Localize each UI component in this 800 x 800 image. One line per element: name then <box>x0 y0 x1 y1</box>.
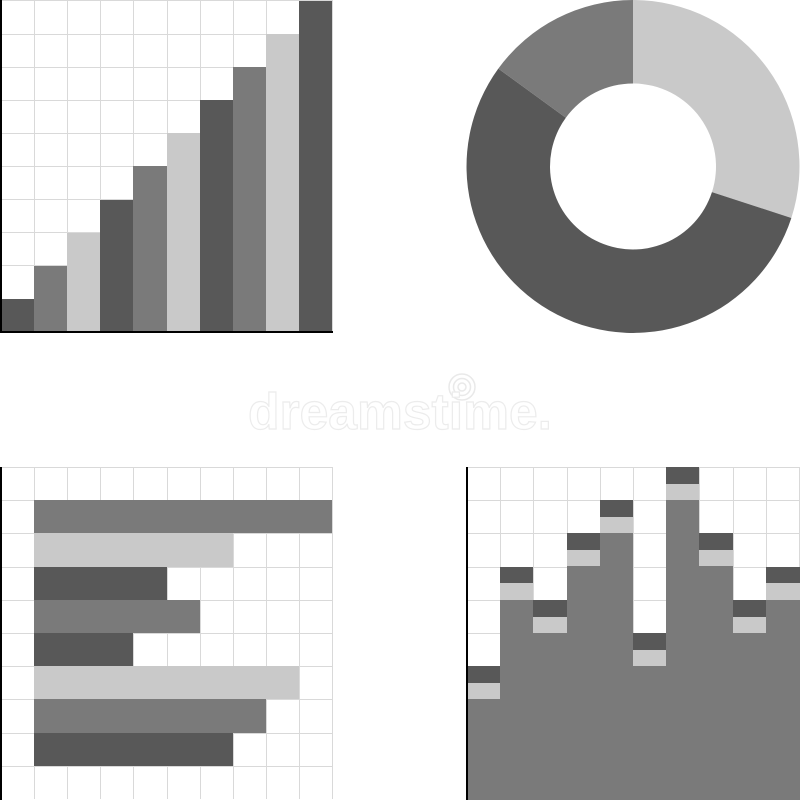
panel: horizontal bar chart <box>1 467 333 800</box>
donut slice: light 30 percent <box>633 0 799 218</box>
watermark icon: spiral <box>449 374 475 400</box>
donut slice: medium 15 percent <box>498 0 633 118</box>
watermark text: dreamstime. <box>248 383 552 440</box>
column caps: dark <box>468 467 800 683</box>
panel: donut chart <box>467 0 799 333</box>
area columns <box>468 500 800 800</box>
donut slice: dark 55 percent <box>467 69 791 333</box>
panel: ascending bar chart <box>1 0 333 332</box>
panel: stacked column chart <box>467 467 800 800</box>
column caps: light <box>468 484 800 699</box>
watermark <box>248 374 552 440</box>
